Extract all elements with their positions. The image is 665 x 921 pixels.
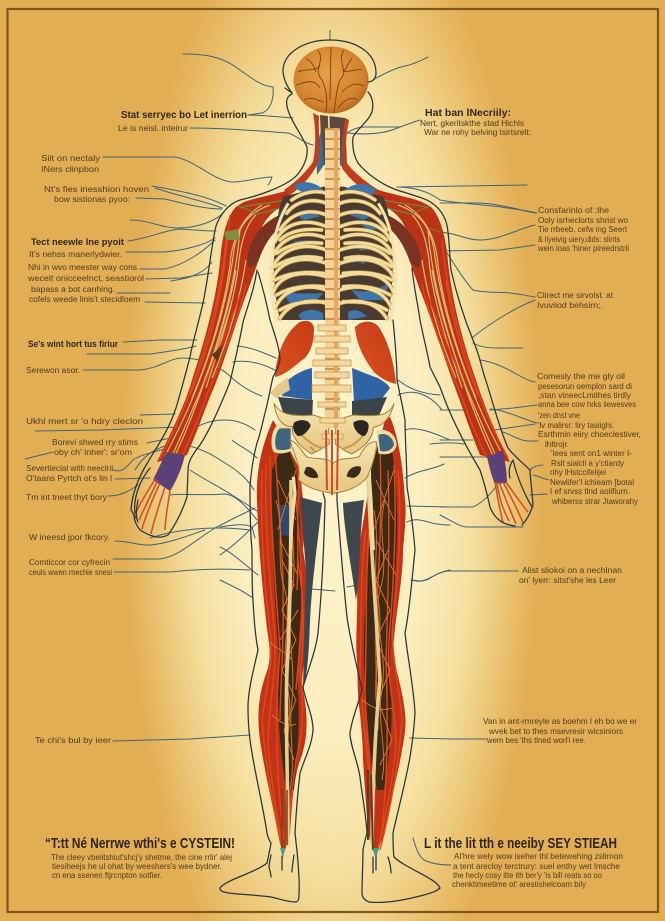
left elbow dark tissue [212,345,222,362]
right leg strands [360,450,402,850]
label: hand block: O'taans Pyrtch ot's lin l [26,473,112,483]
left cage side [271,203,288,322]
label: hip: W ineesd jpor fkcory. [29,532,110,542]
label: thigh note [519,565,622,585]
left shoulder nerve branch [238,200,285,214]
spine [312,55,351,495]
left arm muscle [157,189,292,462]
label: shoulder note [44,184,149,204]
left inner arm outline [134,270,257,537]
label: top left heading [118,110,247,133]
right dark abdomen [352,397,387,420]
left ankle tip [280,848,285,858]
right ilium [335,403,394,454]
label: forearm block: ,stan vineecLmithes tirdly [538,390,632,400]
bottom left body text: cn ena ssenen ftjrcnpton sotfier. [52,870,162,880]
left shoulder green nerve band [224,229,240,240]
label: knee: Te chi's bul by ieer [35,735,111,745]
left obturator hole [304,467,318,478]
pelvis [271,403,397,550]
left arm [134,189,292,534]
left blue abdomen [282,368,312,400]
bottom right body text: chenktimeetime ot' arestishelcoam bily [452,879,587,889]
right kidney organ [355,322,396,384]
label: hand block: Severtieclal with neeclril [26,463,113,473]
right hand fingers [495,482,528,524]
left hip blue patch [275,428,291,450]
left neck muscle [284,113,319,195]
bottom right caption [424,835,623,889]
left arm red strands [160,215,246,458]
right hand finger loop [509,460,532,507]
right leg muscle [356,417,406,856]
left labels [26,110,247,745]
thoracic organs behind rib cage [274,182,393,320]
label: top right heading: Nert, gkeritskthe stad Hichls [420,118,524,128]
left thigh bone shadow [300,497,322,690]
left leg muscle [257,420,309,856]
label: upper left note: Siit on nectaly [41,153,101,163]
right shoulder nerve branch [383,200,440,232]
label: top right heading: War ne rohy belving tsirtsrelt: [424,127,531,137]
bottom right body text [452,851,623,889]
label: forearm block: Esrthmin eiiry choeclestiver, [538,429,641,439]
label: shoulder block [537,205,629,253]
label: palm: Tm int tneet thyt bory [26,492,108,502]
right thigh bone shadow [343,500,364,600]
right hip side patch [377,430,397,454]
left leg strands [262,450,303,850]
label: hand block [26,463,113,483]
right obturator hole [347,466,361,478]
rib cage [271,192,395,322]
neck blue vessels [316,130,348,175]
left wrist purple nerve [153,452,185,491]
left shoulder deep muscle [247,214,283,267]
left hip side patch [271,423,292,454]
left kidney organ [275,321,314,377]
left foot details [269,855,294,877]
bottom right title: L it the lit tth e neeiby SEY STIEAH [424,835,617,852]
left arm tan strands [165,205,270,456]
right leg fine branches [362,470,396,790]
label: upper left note: INers clinpbon [41,164,99,174]
left leg [257,420,322,858]
label: forearm block: 'lees sent on1 winter I- [551,448,632,458]
left hand finger loop [135,468,150,522]
label: shoulder note: bow sistionas pyoo: [54,194,130,204]
right ankle tip [373,848,379,858]
bottom left body text: tiesiheejs he ul ohat by weeshers's wee bydner. [52,861,222,871]
label: thigh note: on' lyerr: sitst'she les Leer [519,575,616,585]
label: thigh block: ceuls wwen rnechie snesi [29,567,112,577]
label: forearm block: anna bee cow hrks iiewesves [538,399,636,409]
abdominal organs [270,321,396,421]
right torso and leg outline [337,320,440,903]
label: top right heading: Hat ban lNecriily: [425,107,511,119]
label: forearm block: Rslt sialcli a y'ctiardy [551,458,625,468]
brain mass [294,46,368,114]
label: shoulder block: Consfarinlo of :lhe [538,205,609,215]
label: top right heading [420,107,531,137]
right pelvic hole [353,420,369,436]
label: forearm block: Newlifer'l ichieam [botal [550,477,634,487]
label: forearm block: 'zen dnst vne [538,410,580,420]
label: wrist note: Ukhl mert sr 'o hdry cleclon [26,416,143,426]
right blue abdomen [352,368,390,401]
left pelvic nerve [291,477,295,550]
label: forearm block: rihy lHstccifelijei [550,467,606,477]
left leg main nerve [286,480,291,845]
left leg fine branches [268,470,298,790]
label: upper arm block: Nhi in wvo meester way cons [28,262,137,272]
right labels [420,107,641,745]
lower pelvic ring [290,440,377,493]
right inner arm outline [412,268,515,526]
sacrum red lines [326,430,338,495]
label: shoulder block: Ooly isrheclorts shrist wo [538,215,628,225]
bottom left title: “T:tt Né Nerrwe wthi's e CYSTEIN! [45,835,235,852]
left lower rib tip [270,378,290,398]
label: upper arm block: It's nehss manerlydwier. [29,249,122,259]
bottom right body text: a tent arecloy terctrury: suel enthy wet lmsche [453,861,620,871]
label: thigh block [29,557,112,577]
left rib bones [272,192,327,318]
label: upper arm block [27,237,144,304]
label: forearm block: lhltrojr. [545,439,569,449]
label: upper arm block: bapass a bot canhing. [31,284,115,294]
chest cavity [274,187,393,320]
right leg deep tissue [364,430,397,790]
label: upper arm note: Clirect me sirvolst. at [537,290,614,300]
right hip blue patch [378,434,394,451]
left ankle tendons [282,790,287,850]
right leg main nerve [368,470,380,845]
right arm [375,189,528,524]
neck [284,113,382,197]
left hand fingers [134,478,170,534]
label: wrist block: Borevi shwed rry stims [52,437,138,447]
label: calf note: wem bes 'ths tlned worl'i ree. [486,735,586,745]
right arm tan strands [398,205,503,456]
right wrist purple nerve [487,450,507,484]
right arm red strands [422,240,508,458]
label: shoulder note: Nt's fies inesshion hoven [44,184,149,194]
label: upper arm block: cofels weede linis't stecidloem [29,294,140,304]
left thigh blue vessel [280,505,290,536]
label: shoulder block: Tie rrbeeb. cefw ing Seert [538,224,628,234]
label: calf note: Van in ant-rmreyle as boehm l eh bo we er [483,716,637,726]
label: forearm block [537,371,641,506]
head and left shoulder outline [283,40,376,93]
right ribs mirrored [340,192,395,322]
right neck muscle [342,118,382,197]
label: top left heading: Stat serryec bo Let inerrion [121,110,247,121]
left ribs [271,192,327,322]
left leg deep tissue [272,440,302,790]
label: forearm block: I ef srvss tlnd aoiifiurn. [550,486,630,496]
right leg [343,417,406,858]
neck left tick [285,88,292,93]
label: forearm: Serewon asor. [26,365,80,375]
right shoulder deep muscle [385,214,421,267]
brain folds [296,47,364,113]
label: upper arm block: wecelt onicceelnct, seastiorol [27,273,144,283]
lumbar processes [312,325,351,439]
label: upper arm note [537,290,614,310]
blue lung patches [280,182,388,320]
right pelvic nerve [369,477,373,550]
label: shoulder block: & liyeivig uiery,dids: slints [538,234,620,244]
pelvic tan shading [302,435,363,452]
label: elbow: Se's wint hort tus firiur [28,339,118,349]
label: top left heading: Le is neisl. inteirur [118,123,188,133]
left pelvic hole [293,420,311,436]
label: forearm block: 'lv malirsr: liry tasiighi. [538,420,614,430]
label: shoulder block: wein ioas 'hiner pireedrstrli [537,243,629,253]
label: calf note [483,716,637,745]
right arm muscle [375,189,510,462]
label: forearm block: whiberss strar Jtaworahy [551,496,639,506]
left rib shadows [272,192,327,318]
bottom left body text [51,852,232,880]
bottom left body text: The cleey vbeiitshiut'shcj'y shetme. the cine rrlir' alej [51,852,232,862]
bottom right body text: Al'hre wely wow iseher thl betewehing zslirnon [454,851,623,861]
head and right shoulder outline [353,92,533,525]
right ankle tendons [368,770,373,850]
neck tissue [320,115,347,165]
bottom left caption [45,835,235,880]
label: upper arm note: Ivuviiod behsirn;. [537,300,603,310]
label: forearm block: Comesly the me gly oil [537,371,625,381]
left dark abdomen [278,397,313,421]
bottom right body text: the hecly cosy itte ith ber'y 'is bill reats so oo [453,870,602,880]
label: forearm block: pesesorun oemplon sard di [538,381,632,391]
label: upper arm block: Tect neewle lne pyoit [31,237,125,248]
upper cervical nerve [327,55,329,128]
left torso and leg outline [220,272,325,902]
anatomy figure with leader lines [25,30,549,903]
label: wrist block [52,437,138,457]
label: thigh block: Comticcor cor cyfrecin [29,557,110,567]
label: upper left note [41,153,101,174]
spinal column [325,128,340,428]
label: calf note: wvek bet to thes msevresir wicsiniors [488,726,623,736]
label: thigh note: Alist sliokoi on a nechlnan [522,565,622,575]
leader lines to labels [25,30,549,865]
body outline [131,40,533,903]
left ilium [274,403,329,454]
right foot details [373,856,391,873]
label: wrist block: oby ch' inher': sr'om [54,447,132,457]
brain [294,46,368,114]
